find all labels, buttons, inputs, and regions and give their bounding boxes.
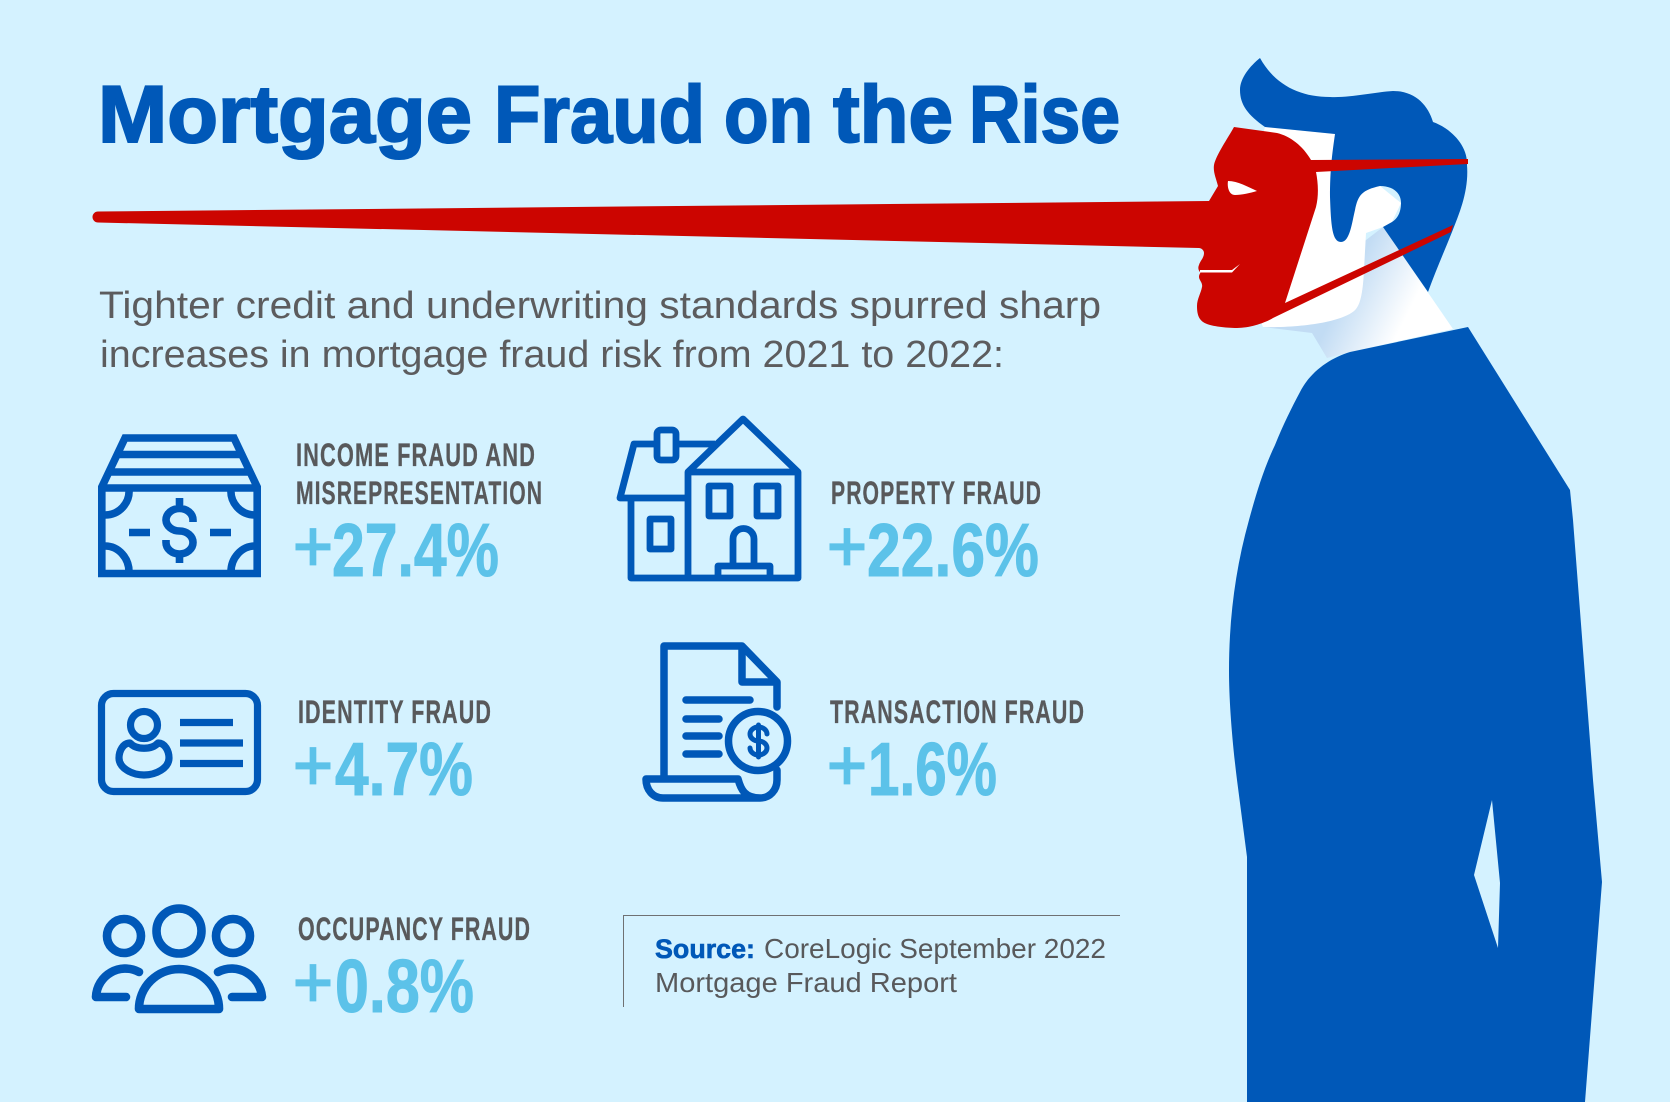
stat: identity fraud xyxy=(293,694,492,811)
title xyxy=(98,70,1120,160)
body xyxy=(1229,327,1602,1102)
neck xyxy=(1263,227,1453,358)
stat: occupancy fraud xyxy=(293,911,531,1028)
stat: occupancy fraud: OCCUPANCY FRAUD xyxy=(298,911,531,947)
source box: Source: xyxy=(655,934,755,964)
red mask and nose xyxy=(92,127,1468,328)
stat: identity fraud: + xyxy=(293,726,333,806)
icon: group of people xyxy=(96,908,262,1009)
intro text: increases in mortgage fraud risk from 2021 to 2022: xyxy=(100,334,1004,376)
stat: transaction fraud: + xyxy=(827,726,867,806)
title: Mortgage xyxy=(98,70,472,160)
title: Rise xyxy=(969,70,1120,160)
icon: money bundle xyxy=(102,438,257,574)
source box: Mortgage Fraud Report xyxy=(655,967,957,998)
stat: transaction fraud xyxy=(827,694,1085,811)
stat: occupancy fraud: 0.8% xyxy=(335,944,474,1028)
stat: property fraud: PROPERTY FRAUD xyxy=(831,475,1042,511)
stat: occupancy fraud: + xyxy=(293,943,333,1023)
stat: income fraud xyxy=(293,437,543,592)
stat: transaction fraud: TRANSACTION FRAUD xyxy=(830,694,1085,730)
face xyxy=(1230,127,1401,327)
stat: income fraud: INCOME FRAUD AND xyxy=(296,437,536,473)
stat: income fraud: MISREPRESENTATION xyxy=(296,475,543,511)
stat: property fraud: + xyxy=(827,507,867,587)
source box: CoreLogic September 2022 xyxy=(764,933,1106,964)
icon: document with dollar coin xyxy=(646,646,788,798)
title: on xyxy=(724,70,813,160)
icon: house xyxy=(620,419,798,578)
hair xyxy=(1240,58,1467,292)
icon: identity card xyxy=(102,694,258,792)
stat: property fraud: 22.6% xyxy=(867,508,1039,592)
stat: income fraud: + xyxy=(293,507,333,587)
intro text: Tighter credit and underwriting standards spurred sharp xyxy=(99,285,1101,327)
stat: income fraud: 27.4% xyxy=(332,508,499,592)
stat: identity fraud: 4.7% xyxy=(335,727,473,811)
stat: identity fraud: IDENTITY FRAUD xyxy=(298,694,492,730)
title: the xyxy=(833,70,953,160)
mouth xyxy=(1200,264,1240,272)
stat: property fraud xyxy=(827,475,1042,592)
intro text xyxy=(99,285,1101,376)
eye xyxy=(1228,181,1257,195)
source box xyxy=(624,916,1120,1007)
stat: transaction fraud: 1.6% xyxy=(868,727,997,811)
title: Fraud xyxy=(494,70,705,160)
